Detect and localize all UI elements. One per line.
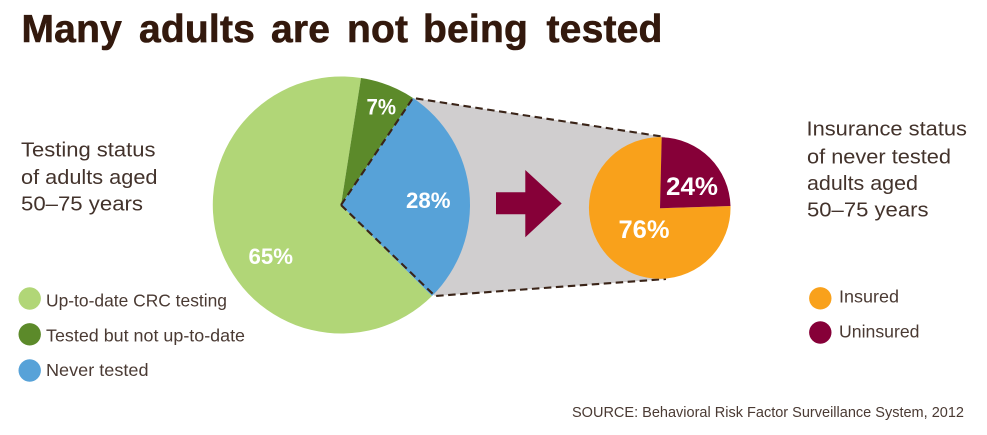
- text block: testing status: of adults aged: [21, 166, 158, 189]
- text block: testing status: 50–75 years: [21, 192, 143, 216]
- text block: testing status: [21, 138, 158, 216]
- legend: testing status: [18, 287, 245, 382]
- dashed connector lines: [341, 98, 666, 296]
- slice: up-to-date 65%: [213, 76, 432, 333]
- title: Many: [22, 8, 122, 51]
- pie chart: insurance status: [589, 137, 731, 279]
- label: 65%: 65%: [248, 244, 293, 269]
- slice: insured 76%: [589, 137, 731, 279]
- slice: tested not up-to-date 7%: [341, 78, 413, 205]
- text block: insurance status: 50–75 years: [807, 198, 928, 222]
- title: adults: [139, 8, 255, 51]
- title: being: [423, 8, 528, 51]
- connector: zoom area: [341, 98, 666, 296]
- legend item: never tested: [18, 359, 148, 382]
- legend item: tested not up-to-date: Tested but not up-to-date: [46, 326, 245, 346]
- pie chart: testing status: [213, 76, 470, 333]
- source: SOURCE: Behavioral Risk Factor Surveillance System, 2012: [572, 405, 964, 421]
- legend item: uninsured: Uninsured: [839, 321, 920, 341]
- arrow: [496, 170, 562, 237]
- text block: testing status: Testing status: [21, 138, 156, 162]
- legend item: up-to-date: Up-to-date CRC testing: [46, 290, 227, 310]
- slice: never tested 28%: [341, 98, 470, 296]
- title: are: [271, 8, 330, 51]
- text block: insurance status: adults aged: [807, 172, 918, 195]
- title: tested: [546, 8, 663, 51]
- legend: insurance status: [809, 286, 920, 344]
- text block: insurance status: [806, 118, 967, 222]
- legend item: never tested: Never tested: [46, 360, 148, 380]
- text block: insurance status: Insurance status: [806, 118, 967, 140]
- label: 76%: 76%: [618, 216, 670, 244]
- label: 7%: 7%: [366, 94, 396, 120]
- slice: uninsured 24%: [660, 137, 730, 208]
- label: 28%: 28%: [406, 188, 450, 213]
- legend item: insured: Insured: [839, 286, 899, 306]
- title: not: [347, 8, 408, 51]
- text block: insurance status: of never tested: [807, 146, 951, 168]
- label: 24%: 24%: [666, 173, 718, 201]
